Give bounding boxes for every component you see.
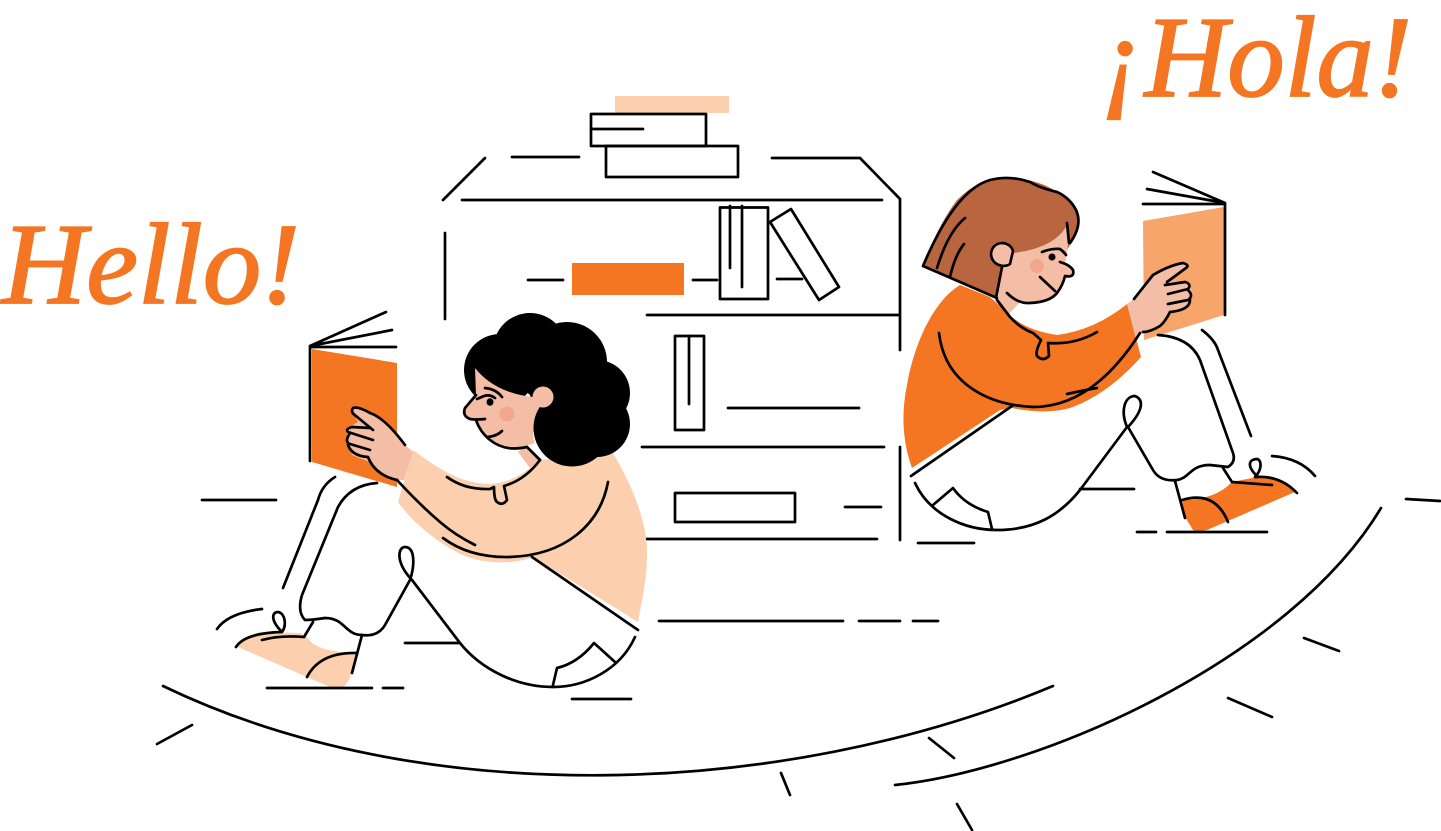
bookshelf (443, 96, 900, 540)
heading: Hello!: Hello! (0, 201, 300, 329)
left girl legs (283, 477, 638, 687)
left girl lower hair (534, 390, 610, 466)
left girl pocket (553, 643, 615, 685)
left girl sweater (398, 450, 647, 622)
left girl arm lines (397, 460, 608, 557)
right girl ground lines (918, 489, 1267, 543)
flat book (675, 493, 795, 522)
right girl hand (1127, 263, 1192, 337)
left girl hair (464, 313, 630, 457)
left girl reading (202, 312, 647, 699)
left girl neck (518, 445, 540, 468)
floor arcs (163, 508, 1381, 785)
right girl pocket (933, 488, 992, 529)
shelf frame (443, 157, 900, 540)
right girl neck (997, 285, 1020, 315)
right girl sweater (903, 285, 1141, 468)
left girl face (464, 368, 545, 448)
right girl legs (911, 330, 1251, 530)
floor dashes (659, 620, 938, 622)
orange book on shelf (572, 263, 684, 295)
upright book (720, 206, 768, 299)
left book (310, 312, 397, 487)
right book (1143, 172, 1225, 340)
right girl arm lines (939, 300, 1140, 407)
right girl face (991, 225, 1073, 303)
right girl hair outline (923, 178, 1078, 298)
left girl shoe (217, 609, 362, 687)
leaning book (770, 209, 839, 300)
left girl hand (347, 407, 413, 480)
right girl reading (903, 172, 1315, 543)
left girl ear (532, 386, 554, 408)
narrow book (675, 336, 704, 430)
right girl shoe (1175, 456, 1315, 531)
left girl ground lines (202, 500, 631, 699)
books stacked on top of shelf (591, 96, 738, 177)
right girl hair (923, 177, 1078, 298)
floor ticks (157, 499, 1440, 830)
